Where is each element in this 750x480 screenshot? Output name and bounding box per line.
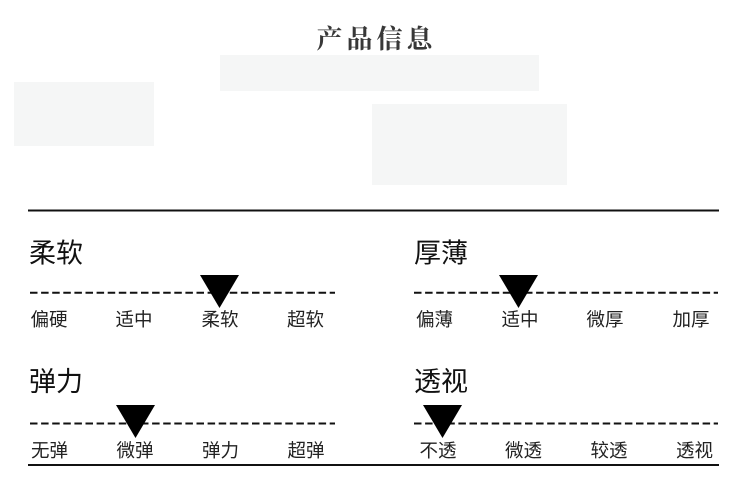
heading: transparency: 透视: [414, 367, 468, 397]
scale labels: 超软: [287, 309, 324, 330]
heading: elasticity: 弹力: [29, 367, 83, 397]
scale labels: 弹力: [202, 440, 239, 461]
scale labels: [416, 309, 710, 330]
scale labels: 超弹: [287, 440, 325, 461]
marker: medium: [499, 275, 538, 308]
scale labels: [419, 440, 713, 461]
top rule: [28, 210, 719, 212]
dashed scale line: [30, 422, 335, 424]
bottom rule: [28, 464, 719, 466]
scale labels: 较透: [590, 440, 628, 461]
scale labels: 偏薄: [416, 309, 453, 330]
marker: not see-through: [423, 405, 462, 438]
dashed scale line: [30, 292, 335, 294]
scale labels: 微弹: [116, 440, 154, 461]
scale labels: 偏硬: [30, 309, 68, 330]
scale labels: 微厚: [586, 309, 624, 330]
marker: slight stretch: [116, 405, 155, 438]
heading: thickness: 厚薄: [414, 238, 468, 268]
scale panel: softness: [29, 238, 335, 330]
placeholder panel: right: [372, 104, 567, 185]
scale panel: thickness: [414, 238, 718, 330]
placeholder panel: left: [14, 82, 154, 146]
marker: soft: [200, 275, 239, 308]
placeholder panel: top centre: [220, 55, 539, 91]
scale panel: elasticity: [29, 367, 335, 461]
scale labels: 微透: [505, 440, 542, 461]
dashed scale line: [414, 292, 718, 294]
title: 产品信息: [316, 25, 437, 54]
scale labels: [31, 440, 325, 461]
scale labels: 柔软: [201, 309, 239, 330]
scale labels: 透视: [676, 440, 713, 461]
scale panel: transparency: [414, 367, 718, 461]
scale labels: [30, 309, 324, 330]
scale labels: 不透: [419, 440, 457, 461]
scale labels: 加厚: [672, 309, 710, 330]
scale labels: 无弹: [31, 440, 68, 461]
dashed scale line: [414, 422, 718, 424]
heading: softness: 柔软: [29, 238, 83, 268]
scale labels: 适中: [501, 309, 539, 330]
scale labels: 适中: [115, 309, 153, 330]
